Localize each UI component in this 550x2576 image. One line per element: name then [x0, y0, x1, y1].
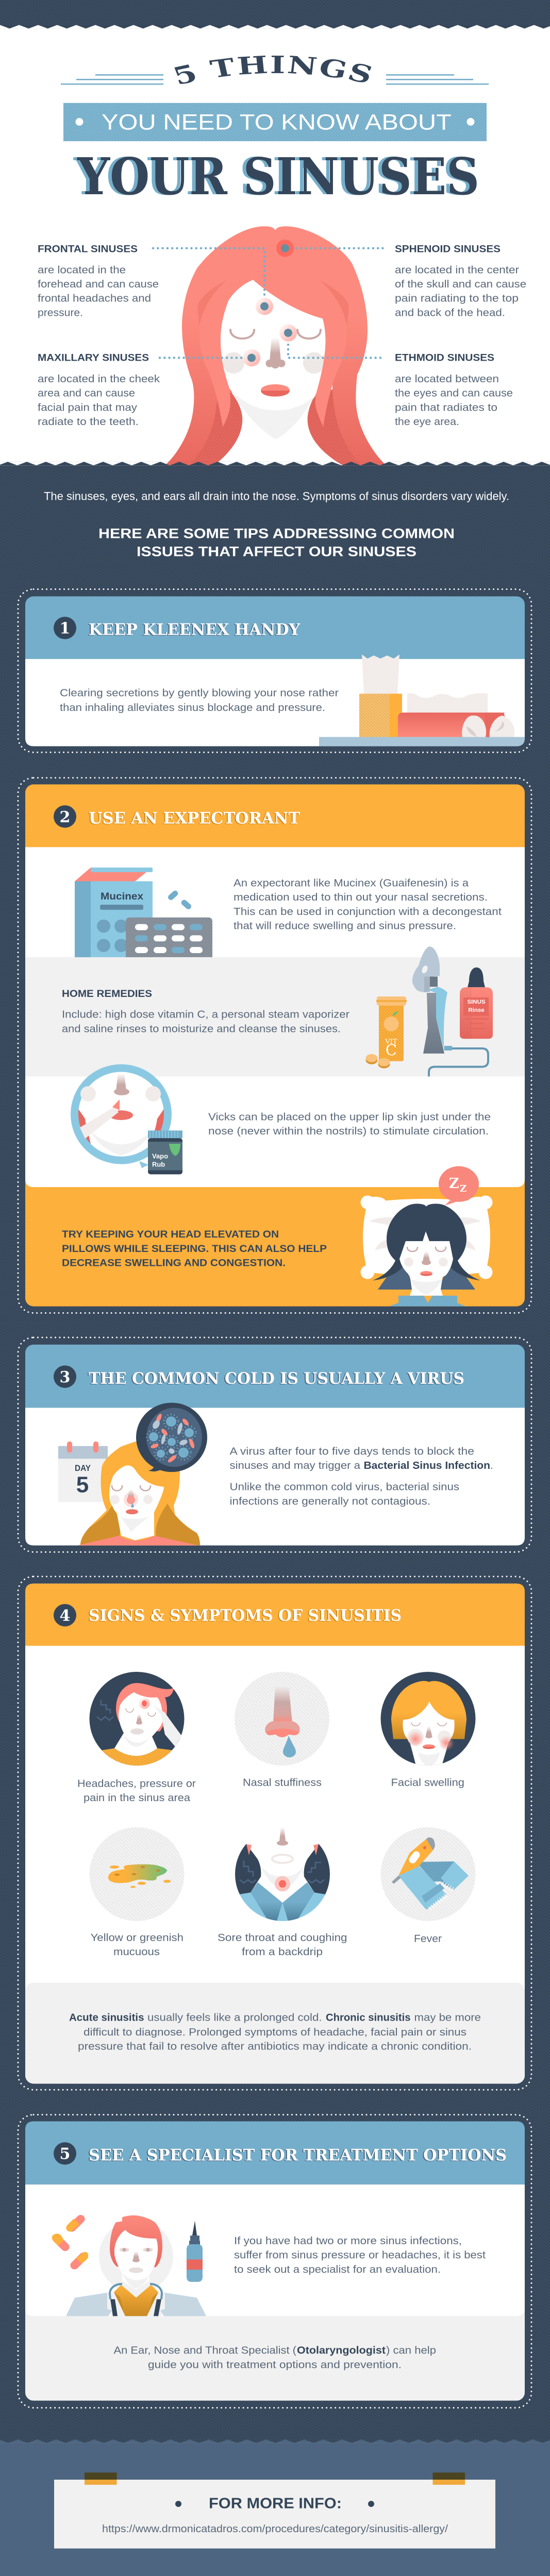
heading 2	[54, 805, 300, 828]
text: sphenoid sinuses: pain radiating to the top	[395, 293, 519, 304]
text: maxillary sinuses: area and can cause	[38, 388, 135, 399]
heading 2: 2	[60, 808, 70, 826]
text: acute and chronic sinusitis: Chronic sinusitis	[326, 2012, 410, 2024]
footer band	[0, 2439, 550, 2576]
heading 2: USE AN EXPECTORANT	[89, 809, 300, 828]
icon: sinus rinse bottle: Rinse	[468, 1007, 485, 1013]
text: maxillary sinuses: radiate to the teeth.	[38, 416, 139, 428]
text: maxillary sinuses	[38, 352, 160, 428]
icon: tissue boxes	[319, 654, 525, 746]
symptom: yellow or greenish mucus	[90, 1827, 185, 1921]
text: mucinex description: that will reduce swelling and sinus pressure.	[234, 921, 456, 931]
heading 4: 4	[60, 1607, 70, 1625]
text: vicks: Vicks can be placed on the upper lip skin just under the	[208, 1112, 491, 1123]
text: sphenoid sinuses: and back of the head.	[395, 307, 505, 318]
text: virus description: A virus after four to five days tends to block the	[229, 1446, 474, 1457]
text: sphenoid sinuses: are located in the center	[395, 264, 519, 276]
label: headaches: pain in the sinus area	[84, 1792, 191, 1804]
text: acute and chronic sinusitis	[69, 2012, 481, 2053]
text: frontal sinuses: forehead and can cause	[38, 279, 159, 290]
icon: calendar day 5: DAY	[75, 1463, 91, 1473]
symptom: nasal stuffiness	[235, 1672, 329, 1766]
text: otolaryngologist: guide you with treatment options and prevention.	[148, 2359, 402, 2370]
text: maxillary sinuses: facial pain that may	[38, 402, 138, 413]
label: mucus	[90, 1932, 184, 1958]
dark page background	[0, 462, 550, 2443]
text: virus description: Unlike the common cold virus, bacterial sinus	[229, 1482, 459, 1493]
text: specialist description: If you have had two or more sinus infections,	[234, 2235, 462, 2247]
text: sphenoid sinuses: of the skull and can cause	[395, 279, 526, 290]
body text 1: than inhaling alleviates sinus blockage and pressure.	[60, 702, 325, 714]
text: virus description	[229, 1446, 493, 1507]
text: mucinex description: An expectorant like Mucinex (Guaifenesin) is a	[234, 878, 469, 889]
icon: sleeping woman on pillow: Z	[449, 1176, 459, 1192]
text: frontal sinuses: are located in the	[38, 264, 126, 276]
icon: mucinex box and pills	[75, 868, 212, 957]
text: virus description: infections are generally not contagious.	[229, 1496, 430, 1507]
icon: calendar day 5: 5	[76, 1472, 89, 1498]
icon: virus speech bubble	[136, 1403, 207, 1472]
symptom: fever	[380, 1827, 475, 1921]
text: otolaryngologist: Otolaryngologist	[297, 2345, 386, 2357]
text: frontal sinuses: FRONTAL SINUSES	[38, 244, 138, 255]
text: otolaryngologist: An Ear, Nose and Throat Specialist (	[113, 2345, 296, 2357]
text: virus description: sinuses and may trigger a	[229, 1460, 361, 1471]
text: frontal sinuses	[38, 244, 159, 318]
text: keep head elevated	[62, 1229, 327, 1268]
icon: steam vaporizer	[412, 946, 488, 1076]
text: ethmoid sinuses: the eyes and can cause	[395, 388, 513, 399]
text: acute and chronic sinusitis: pressure that fail to resolve after antibiotics may indicate a chronic condition.	[78, 2041, 472, 2053]
text: mucinex description: This can be used in conjunction with a decongestant	[234, 906, 502, 918]
icon: vapo rub jar: Vapo	[152, 1153, 168, 1160]
text: virus description: .	[490, 1460, 493, 1471]
text: acute and chronic sinusitis: may be more	[414, 2012, 481, 2024]
icon: vapo rub jar	[148, 1130, 182, 1174]
text: specialist description: suffer from sinus pressure or headaches, it is best	[234, 2250, 486, 2261]
text: specialist description	[234, 2235, 486, 2275]
text: ethmoid sinuses: are located between	[395, 374, 499, 385]
section heading: tips	[98, 526, 455, 559]
text: mucinex description: medication used to thin out your nasal secretions.	[234, 892, 488, 903]
symptom: facial swelling	[380, 1672, 475, 1767]
text: acute and chronic sinusitis: difficult to diagnose. Prolonged symptoms of headache, facial pain or sinus	[84, 2027, 466, 2038]
text: virus description: Bacterial Sinus Infection	[364, 1460, 490, 1471]
text: home remedies: HOME REMEDIES	[62, 988, 152, 999]
text: mucinex description	[234, 878, 502, 931]
text: maxillary sinuses: MAXILLARY SINUSES	[38, 352, 149, 363]
icon: vicks application to lip	[74, 1068, 168, 1168]
footer card: for more info: https://www.drmonicatadros.com/procedures/category/sinusitis-allergy/	[102, 2523, 448, 2535]
body text 1: Clearing secretions by gently blowing your nose rather	[60, 687, 339, 699]
title banner: you need to know about: YOU NEED TO KNOW ABOUT	[102, 110, 452, 134]
body text 1	[60, 687, 339, 714]
text: otolaryngologist: ) can help	[386, 2345, 436, 2357]
icon: vitamin c bottle	[366, 996, 407, 1069]
text: frontal sinuses: frontal headaches and	[38, 293, 151, 304]
text: maxillary sinuses: are located in the cheek	[38, 374, 160, 385]
heading 1	[54, 617, 301, 639]
text: sphenoid sinuses	[395, 244, 526, 318]
icon: calendar day 5	[58, 1442, 108, 1502]
section heading: tips: ISSUES THAT AFFECT OUR SINUSES	[137, 544, 416, 559]
panel 4: signs and symptoms of sinusitis	[18, 1577, 531, 2090]
top zigzag band	[0, 0, 550, 28]
heading 1: KEEP KLEENEX HANDY	[89, 621, 301, 639]
icon: sinus rinse bottle	[460, 968, 493, 1039]
icon: vapo rub jar: Rub	[152, 1161, 165, 1168]
icon: woman with cold	[77, 1442, 200, 1546]
icon: vitamin c bottle: VIT	[385, 1038, 397, 1046]
text: otolaryngologist	[113, 2345, 436, 2370]
icon: nasal spray bottle	[187, 2221, 203, 2282]
text: ethmoid sinuses: the eye area.	[395, 416, 459, 428]
text: acute and chronic sinusitis: usually feels like a prolonged cold.	[147, 2012, 322, 2024]
label: mucus: mucuous	[113, 1946, 160, 1958]
title banner: you need to know about	[63, 103, 487, 141]
text: home remedies	[62, 988, 349, 1035]
icon: vitamin c bottle: C	[386, 1041, 397, 1059]
heading 5: SEE A SPECIALIST FOR TREATMENT OPTIONS	[89, 2146, 507, 2165]
text: ethmoid sinuses	[395, 352, 513, 428]
panel 3: the common cold is usually a virus	[18, 1337, 531, 1552]
footer card: for more info: FOR MORE INFO:	[209, 2496, 342, 2512]
text: frontal sinuses: pressure.	[38, 307, 83, 318]
heading 4: SIGNS & SYMPTOMS OF SINUSITIS	[89, 1606, 402, 1625]
icon: sinus rinse bottle: SINUS	[467, 999, 486, 1005]
text: vicks	[208, 1112, 491, 1137]
label: headaches: Headaches, pressure or	[77, 1778, 196, 1790]
section heading: tips: HERE ARE SOME TIPS ADDRESSING COMMON	[98, 526, 455, 541]
panel 1: keep kleenex handy	[18, 589, 531, 752]
text: ethmoid sinuses: pain that radiates to	[395, 402, 497, 413]
text: acute and chronic sinusitis: Acute sinusitis	[69, 2012, 144, 2024]
icon: mucinex box and pills: Mucinex	[101, 891, 143, 902]
title: 5 things	[61, 56, 489, 84]
text: keep head elevated: DECREASE SWELLING AND CONGESTION.	[62, 1258, 286, 1268]
text: specialist description: to seek out a specialist for an evaluation.	[234, 2264, 441, 2275]
text: vicks: nose (never within the nostrils) to stimulate circulation.	[208, 1126, 489, 1137]
heading 1: 1	[60, 620, 70, 638]
text: home remedies: and saline rinses to moisturize and cleanse the sinuses.	[62, 1023, 341, 1035]
title: your sinuses: YOUR SINUSES	[77, 147, 479, 207]
label: nasal stuffiness: Nasal stuffiness	[243, 1777, 322, 1789]
label: mucus: Yellow or greenish	[90, 1932, 184, 1943]
label: sore throat	[218, 1932, 347, 1958]
icon: doctor	[66, 2215, 206, 2316]
icon: sleeping woman on pillow: Z	[460, 1183, 466, 1194]
panel 2: use an expectorant	[18, 778, 531, 1313]
text: ethmoid sinuses: ETHMOID SINUSES	[395, 352, 494, 363]
text: home remedies: Include: high dose vitamin C, a personal steam vaporizer	[62, 1009, 349, 1021]
footer card: for more info	[54, 2472, 495, 2549]
icon: sleeping woman on pillow	[361, 1166, 493, 1307]
label: sore throat: Sore throat and coughing	[218, 1932, 347, 1943]
icon: capsules	[51, 2213, 89, 2271]
label: fever: Fever	[414, 1933, 442, 1944]
illustration: face with sinus locations	[153, 226, 386, 465]
intro sentence: The sinuses, eyes, and ears all drain into the nose. Symptoms of sinus disorders vary widely.	[44, 490, 509, 502]
title: 5 things: 5 THINGS	[174, 56, 371, 84]
label: sore throat: from a backdrip	[242, 1946, 323, 1958]
heading 3: THE COMMON COLD IS USUALLY A VIRUS	[89, 1369, 464, 1388]
label: headaches	[77, 1778, 196, 1804]
panel 5: see a specialist	[18, 2115, 531, 2408]
symptom: headache	[90, 1672, 185, 1769]
heading 3: 3	[60, 1368, 70, 1386]
label: facial swelling: Facial swelling	[391, 1777, 464, 1789]
symptom: sore throat	[235, 1827, 330, 1922]
text: keep head elevated: TRY KEEPING YOUR HEAD ELEVATED ON	[62, 1229, 279, 1240]
heading 5: 5	[60, 2145, 70, 2163]
text: keep head elevated: PILLOWS WHILE SLEEPING. THIS CAN ALSO HELP	[62, 1243, 327, 1255]
text: sphenoid sinuses: SPHENOID SINUSES	[395, 244, 501, 255]
